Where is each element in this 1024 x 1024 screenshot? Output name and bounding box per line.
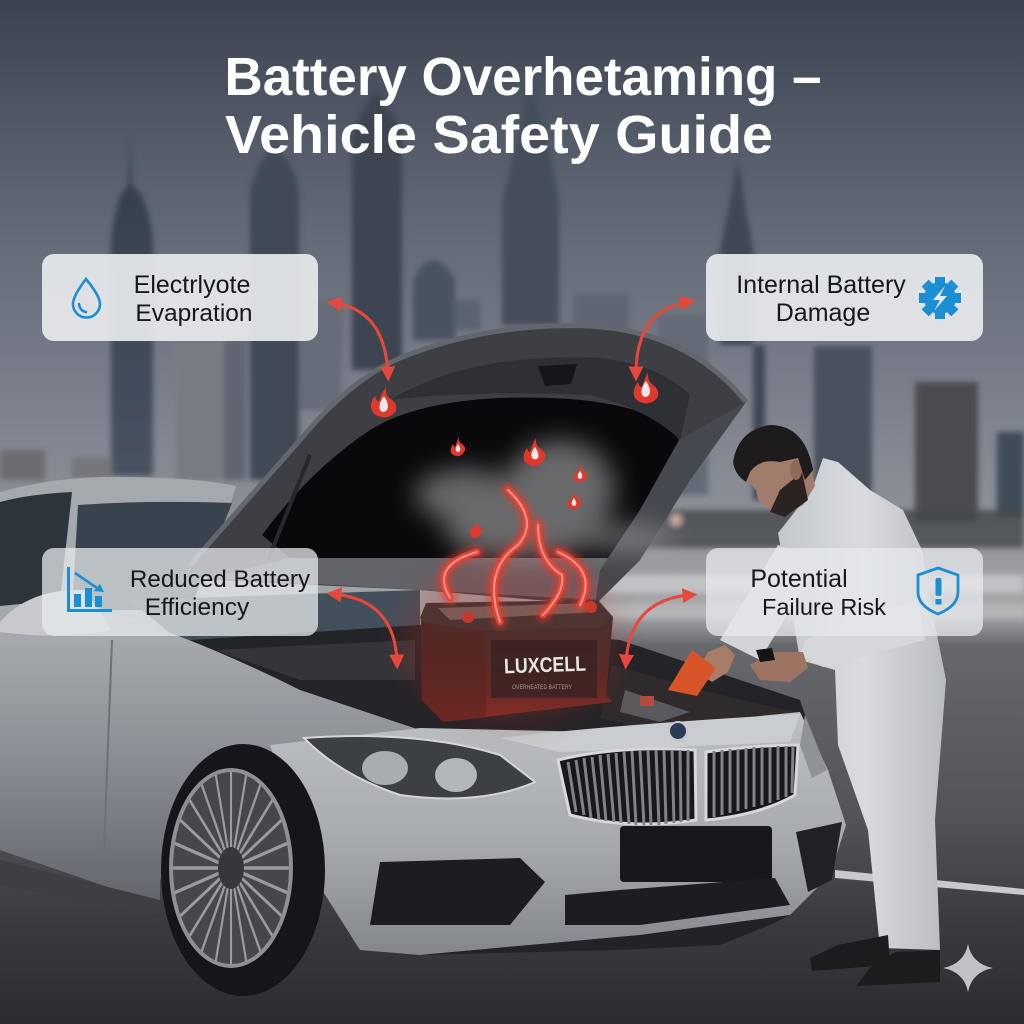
- card: Internal Battery Damage: Damage: [776, 299, 870, 327]
- engine bay: [190, 625, 810, 735]
- card: Potential Failure Risk: Potential: [750, 565, 848, 593]
- red arrows: [334, 302, 690, 662]
- battery glow: [400, 555, 620, 725]
- front wheel: [161, 744, 325, 996]
- card: Reduced Battery Efficiency: [42, 548, 318, 636]
- car body: door and fender: [0, 590, 560, 915]
- hands: [697, 645, 735, 682]
- card: Potential Failure Risk: Failure Risk: [762, 594, 886, 620]
- open hood: [190, 326, 746, 605]
- battery with LUXCELL label: [420, 600, 613, 722]
- smoke: [415, 440, 675, 560]
- legs and torso: [778, 458, 946, 950]
- card: Internal Battery Damage: [706, 254, 983, 341]
- heat flames: [444, 490, 586, 622]
- card: Electrolyte Evaporation: [42, 254, 318, 341]
- head: [747, 435, 815, 516]
- sleeve far arm: [800, 600, 925, 667]
- card: Electrolyte Evaporation: Electrlyote: [134, 271, 250, 299]
- shoes: [810, 935, 890, 971]
- icon: warning shield: [918, 568, 958, 614]
- title: Vehicle Safety Guide: [225, 105, 773, 165]
- lower bumper intakes: [370, 822, 842, 955]
- card: Potential Failure Risk: [706, 548, 983, 636]
- battery with LUXCELL label: OVERHEATED BATTERY: [512, 685, 572, 691]
- mechanic: [668, 425, 946, 986]
- title: [224, 47, 822, 165]
- card: Internal Battery Damage: Internal Battery: [736, 271, 906, 299]
- car: roof and side window: [0, 477, 420, 650]
- headlight: [304, 715, 827, 798]
- tester: [668, 650, 716, 696]
- sparkle mark: [943, 944, 993, 992]
- grille: [558, 722, 798, 825]
- small flame icons: [371, 372, 658, 538]
- icon: falling bar chart: [67, 567, 112, 612]
- icon: gear with lightning: [919, 277, 961, 319]
- license plate: [620, 826, 772, 882]
- road line: [835, 870, 1024, 895]
- card: Reduced Battery Efficiency: Efficiency: [145, 594, 250, 621]
- sleeve near arm: [720, 545, 820, 660]
- car front bumper: [270, 712, 846, 955]
- card: Electrolyte Evaporation: Evapration: [135, 300, 253, 327]
- skyline towers: [0, 85, 1024, 618]
- title: Battery Overhetaming –: [224, 47, 822, 107]
- battery with LUXCELL label: LUXCELL: [504, 653, 587, 678]
- icon: water drop: [73, 279, 100, 318]
- card: Reduced Battery Efficiency: Reduced Battery: [130, 566, 311, 593]
